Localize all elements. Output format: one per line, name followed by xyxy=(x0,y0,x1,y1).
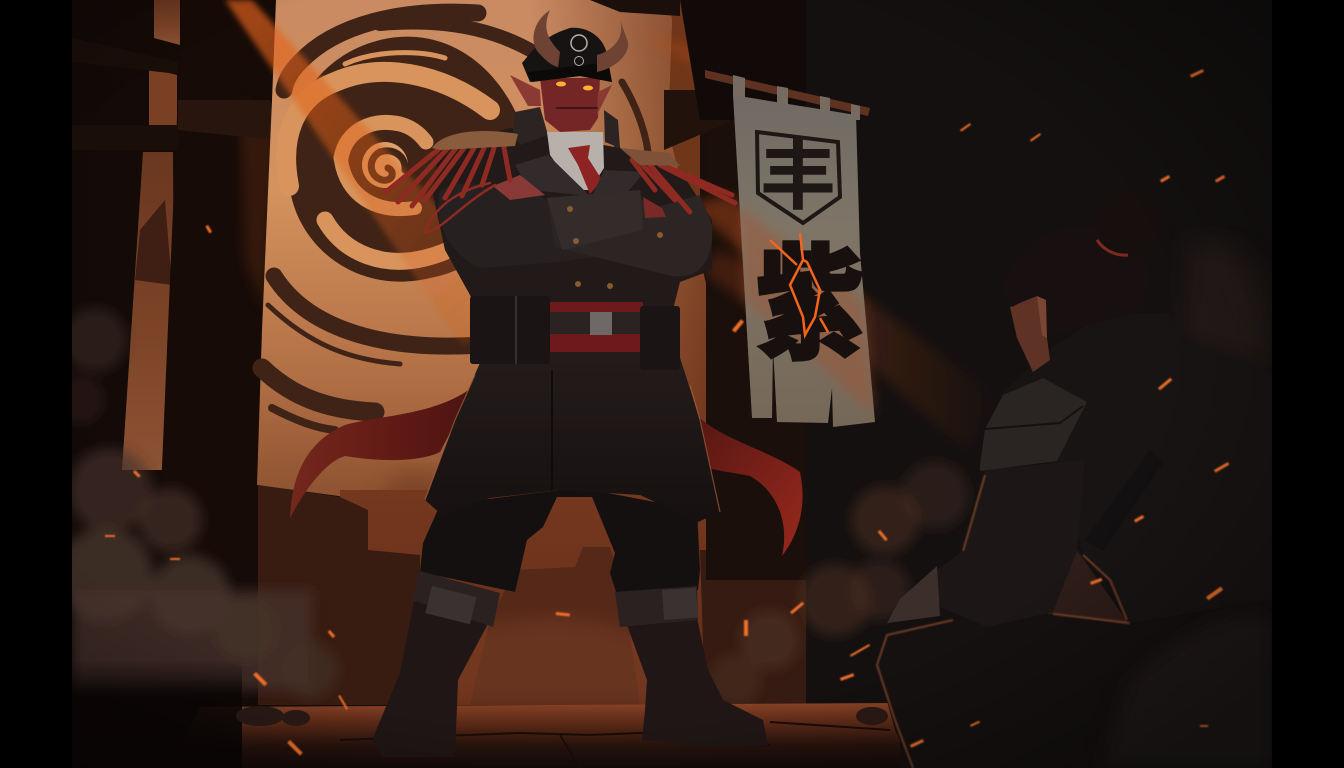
buttons xyxy=(567,206,663,289)
waist gap xyxy=(1040,540,1140,640)
spiral core xyxy=(362,142,408,188)
hair xyxy=(1002,226,1147,338)
long coat skirt xyxy=(425,340,720,522)
trousers xyxy=(420,490,700,595)
leg haze xyxy=(1100,616,1272,768)
ear xyxy=(1037,296,1047,338)
arm xyxy=(933,460,1085,627)
legs xyxy=(877,600,1272,768)
embers xyxy=(105,69,1229,756)
head xyxy=(510,75,612,132)
red epaulettes xyxy=(386,148,735,232)
crossed arms xyxy=(438,175,712,277)
face xyxy=(1010,296,1050,372)
left wooden pillars xyxy=(72,0,278,560)
stone blocks behind the legs xyxy=(258,485,806,705)
lower light rays xyxy=(690,195,1000,450)
smoke left xyxy=(56,308,338,698)
smoke right xyxy=(709,461,969,706)
diagonal strap xyxy=(1085,450,1163,551)
kneeling samurai xyxy=(877,190,1272,768)
banner crest: 丰 xyxy=(760,135,836,220)
rim light lines xyxy=(877,475,1130,768)
right boot xyxy=(615,586,768,747)
banner ray tint xyxy=(738,205,875,415)
floor darkness xyxy=(72,660,242,768)
cape xyxy=(290,385,803,556)
hanging banner xyxy=(705,70,875,427)
rocks xyxy=(236,706,888,726)
dark right wall xyxy=(664,0,1272,710)
banner glyph: 紫 xyxy=(756,236,864,375)
area behind banner top right xyxy=(590,0,700,560)
hair bun xyxy=(1096,190,1162,256)
shoulder armor xyxy=(980,378,1087,471)
light spiral bands xyxy=(286,53,490,261)
swirl banner xyxy=(257,0,712,545)
glowing crack xyxy=(770,233,828,335)
left boot xyxy=(372,571,500,757)
officer cap and horns xyxy=(522,10,628,82)
belt and pouches xyxy=(470,296,680,370)
back and torso xyxy=(1000,313,1272,623)
banner stains xyxy=(360,470,620,545)
floor xyxy=(170,703,900,768)
banner pole xyxy=(705,70,870,116)
light rays over banner xyxy=(225,0,1060,345)
dark frame at top of banner xyxy=(590,0,680,16)
hand xyxy=(887,566,940,623)
officer xyxy=(290,10,803,757)
hair tie xyxy=(1097,240,1128,255)
torso xyxy=(432,128,712,345)
lapels and shirt xyxy=(513,107,645,200)
spiral strokes xyxy=(262,12,648,430)
